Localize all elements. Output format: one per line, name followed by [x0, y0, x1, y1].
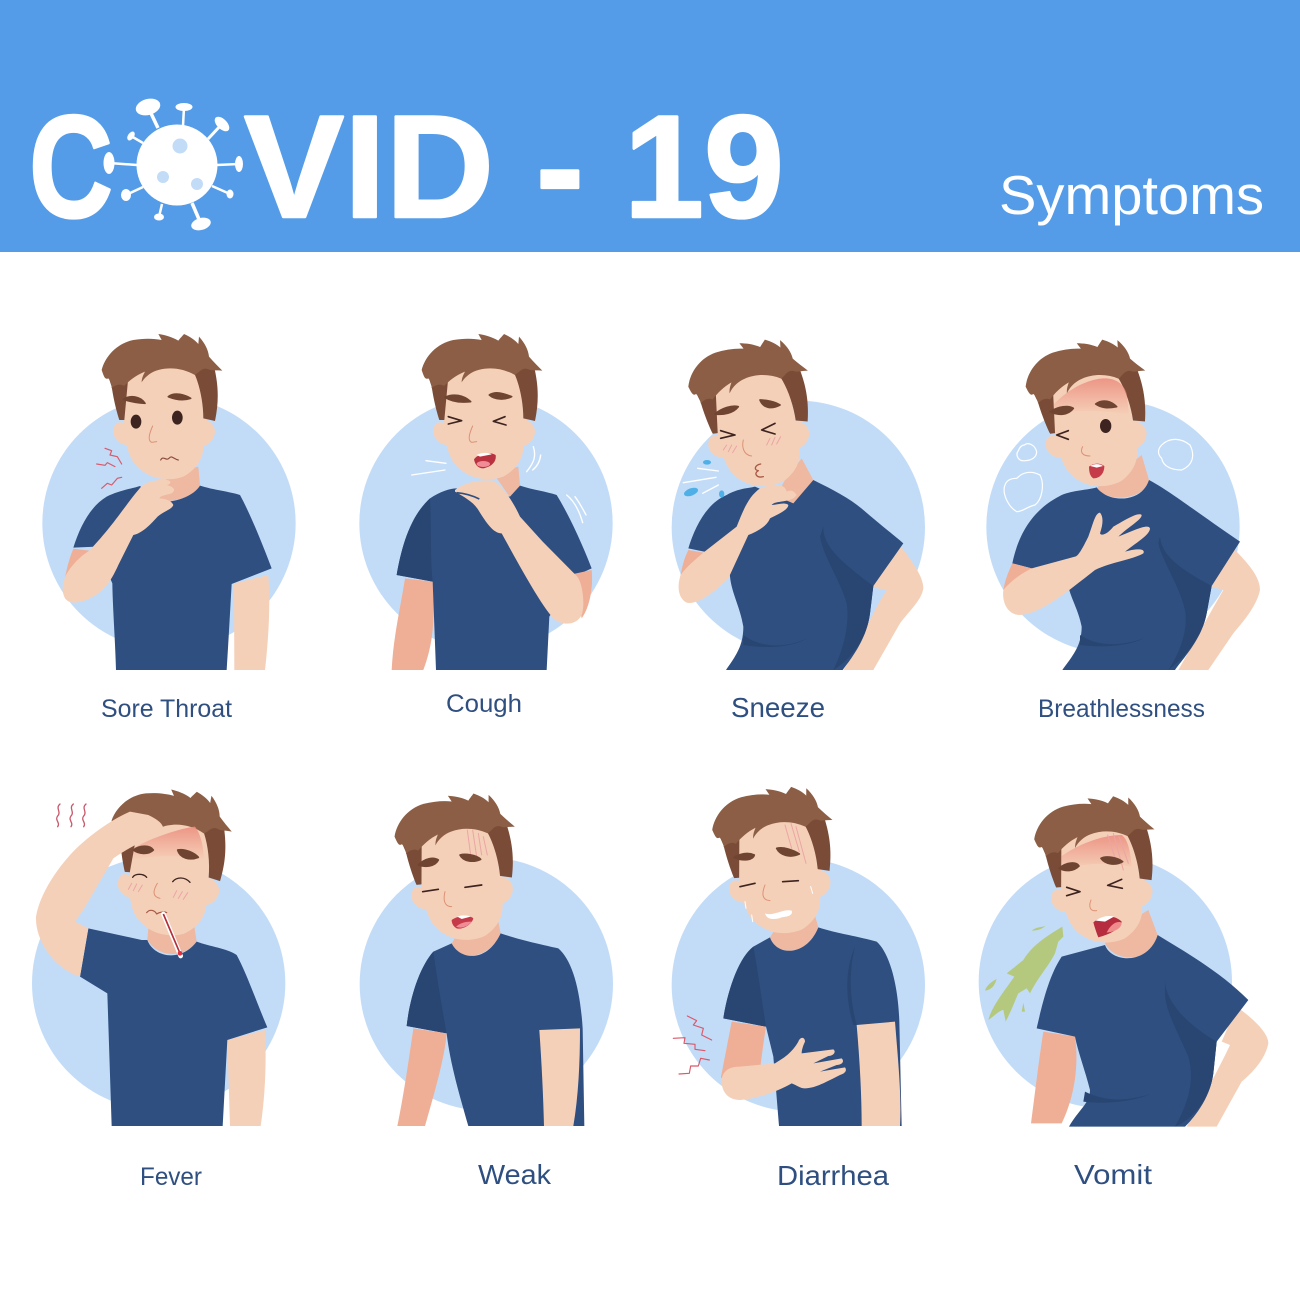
- panel: sore throat: [42, 334, 296, 723]
- label: Weak: [478, 1159, 552, 1190]
- title: VID: [244, 85, 494, 248]
- label: Sore Throat: [101, 695, 232, 723]
- label: Cough: [446, 690, 522, 718]
- panel: vomit: [979, 793, 1268, 1190]
- figure: man sneezing: [672, 334, 925, 670]
- panel: sneeze: [672, 334, 925, 723]
- figure: man coughing: [359, 334, 613, 670]
- figure: man short of breath: [986, 334, 1260, 670]
- panel: cough: [359, 334, 613, 718]
- label: Sneeze: [731, 692, 825, 723]
- header banner: [0, 0, 1300, 252]
- panel: fever: [32, 785, 285, 1191]
- figure: man vomiting: [979, 793, 1268, 1127]
- figure: man with fever and thermometer: [32, 785, 285, 1126]
- icon: virus as letter O: [104, 96, 243, 232]
- panel: breathlessness: [986, 334, 1260, 723]
- figure: man holding stomach: [672, 784, 925, 1126]
- label: Vomit: [1074, 1159, 1152, 1190]
- title: C: [29, 85, 113, 248]
- label: Diarrhea: [777, 1160, 889, 1191]
- label: Breathlessness: [1038, 695, 1205, 723]
- panel: diarrhea: [672, 784, 925, 1191]
- title: - 19: [536, 85, 784, 248]
- title: [29, 85, 784, 248]
- panel: weak: [360, 790, 613, 1190]
- subtitle: Symptoms: [999, 164, 1264, 226]
- label: Fever: [140, 1163, 202, 1191]
- figure: man holding throat: [42, 334, 296, 670]
- figure: weak man: [360, 790, 613, 1126]
